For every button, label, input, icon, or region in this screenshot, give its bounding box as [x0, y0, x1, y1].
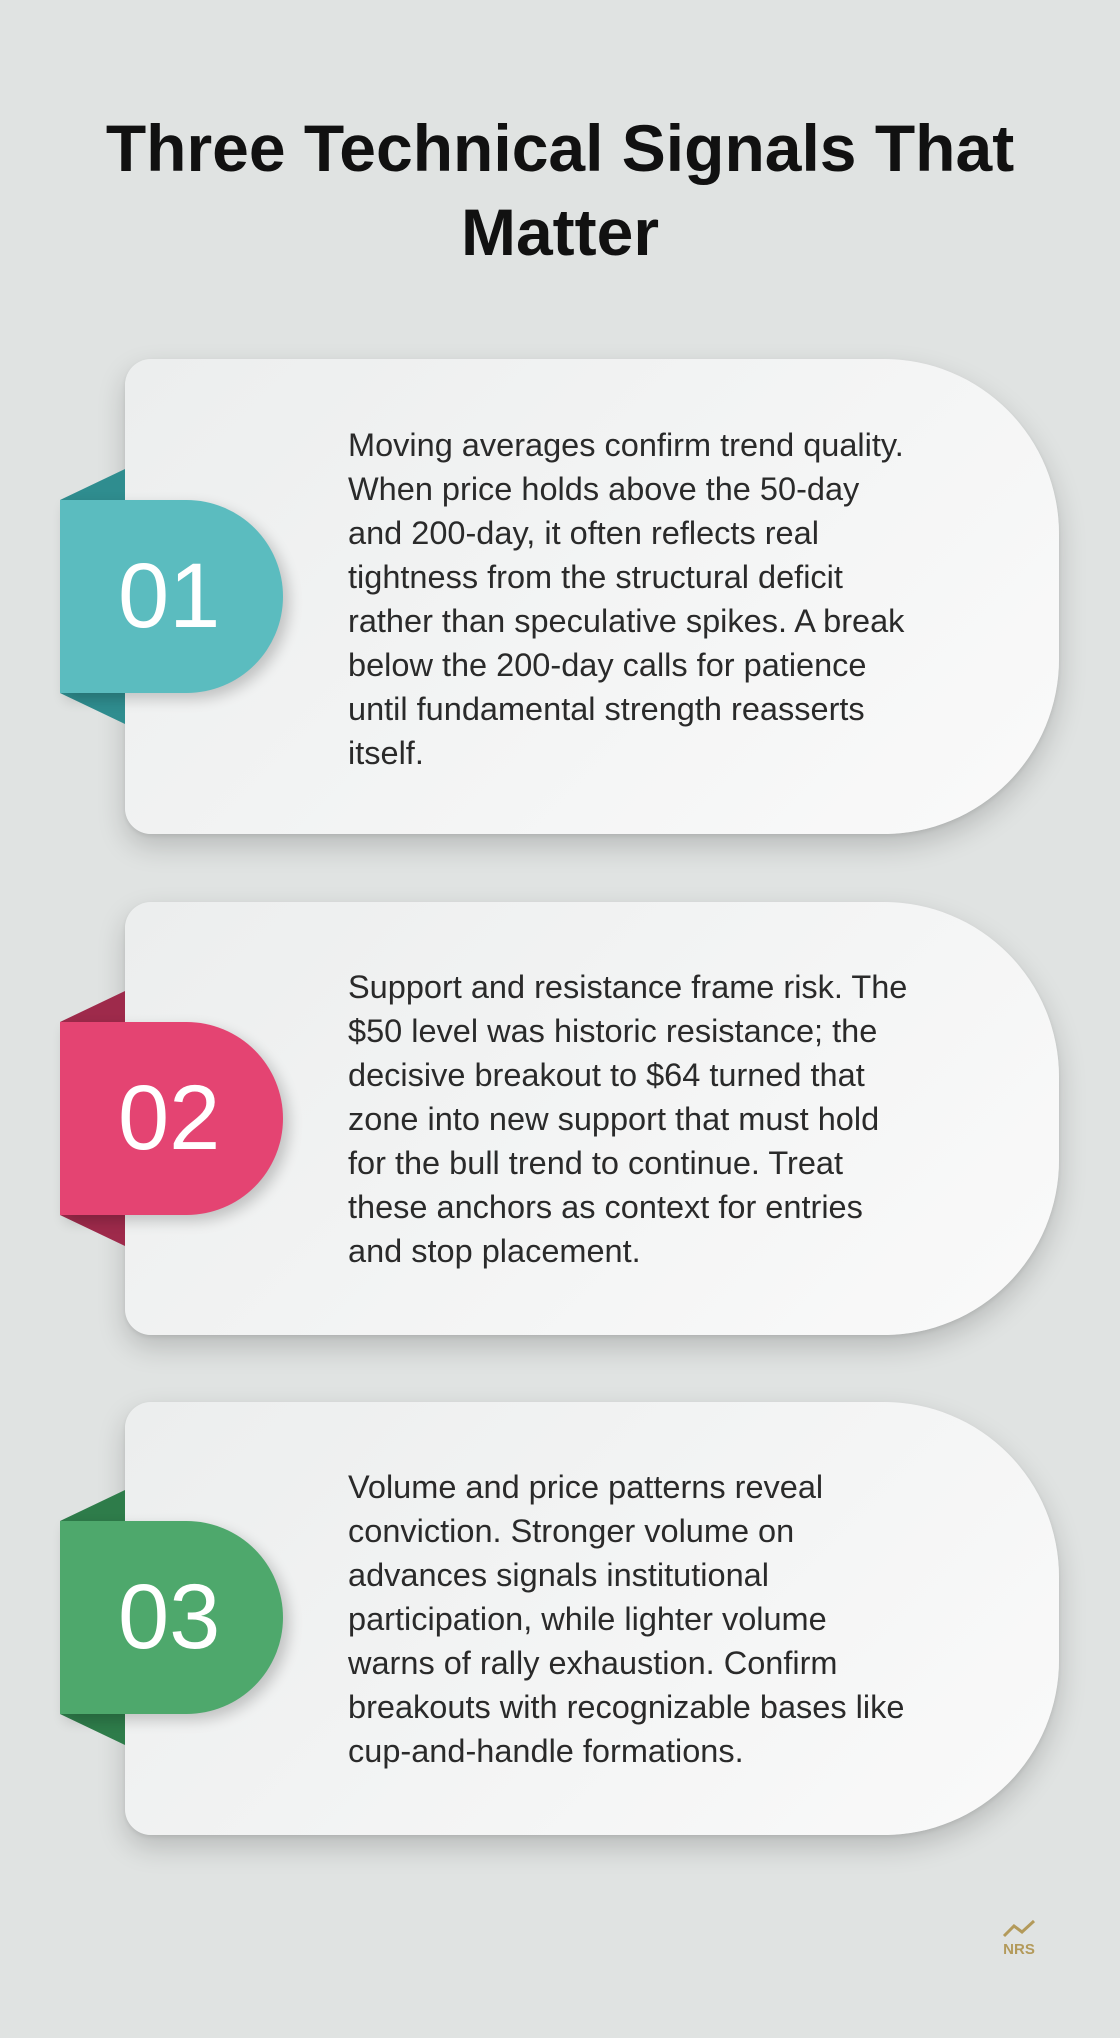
badge 02: [60, 1022, 283, 1215]
fold: card 3 top: [60, 1490, 125, 1521]
badge 01: 01: [118, 545, 220, 647]
logo: NRS: [1003, 1941, 1035, 1958]
fold: card 1 top: [60, 469, 125, 500]
text block 2: these anchors as context for entries: [348, 1189, 863, 1225]
text block 2: for the bull trend to continue. Treat: [348, 1145, 843, 1181]
text block 1: rather than speculative spikes. A break: [348, 603, 904, 639]
text block 3: advances signals institutional: [348, 1557, 769, 1593]
text block 3: [348, 1469, 904, 1769]
text block 3: Volume and price patterns reveal: [348, 1469, 823, 1505]
text block 1: until fundamental strength reasserts: [348, 691, 865, 727]
badge 01: [60, 500, 283, 693]
text block 3: breakouts with recognizable bases like: [348, 1689, 904, 1725]
text block 1: itself.: [348, 735, 424, 771]
text block 1: [348, 427, 904, 771]
text block 3: cup-and-handle formations.: [348, 1733, 744, 1769]
text block 2: decisive breakout to $64 turned that: [348, 1057, 865, 1093]
fold: card 3 bottom: [60, 1714, 125, 1745]
text block 1: tightness from the structural deficit: [348, 559, 843, 595]
badge 03: [60, 1521, 283, 1714]
text block 1: and 200-day, it often reflects real: [348, 515, 819, 551]
fold: card 1 bottom: [60, 693, 125, 724]
title: [106, 111, 1014, 269]
title: Matter: [461, 195, 659, 269]
text block 1: Moving averages confirm trend quality.: [348, 427, 904, 463]
text block 2: $50 level was historic resistance; the: [348, 1013, 877, 1049]
panel: card 3: [125, 1402, 1059, 1835]
text block 2: [348, 969, 907, 1269]
text block 3: warns of rally exhaustion. Confirm: [348, 1645, 838, 1681]
text block 2: zone into new support that must hold: [348, 1101, 879, 1137]
fold: card 2 top: [60, 991, 125, 1022]
text block 3: participation, while lighter volume: [348, 1601, 827, 1637]
text block 2: Support and resistance frame risk. The: [348, 969, 907, 1005]
panel: card 2: [125, 902, 1059, 1335]
text block 1: below the 200-day calls for patience: [348, 647, 867, 683]
text block 3: conviction. Stronger volume on: [348, 1513, 794, 1549]
badge 02: 02: [118, 1067, 220, 1169]
title: Three Technical Signals That: [106, 111, 1014, 185]
logo: [1003, 1920, 1035, 1958]
text block 2: and stop placement.: [348, 1233, 641, 1269]
fold: card 2 bottom: [60, 1215, 125, 1246]
text block 1: When price holds above the 50-day: [348, 471, 859, 507]
panel: card 1: [125, 359, 1059, 834]
badge 03: 03: [118, 1566, 220, 1668]
